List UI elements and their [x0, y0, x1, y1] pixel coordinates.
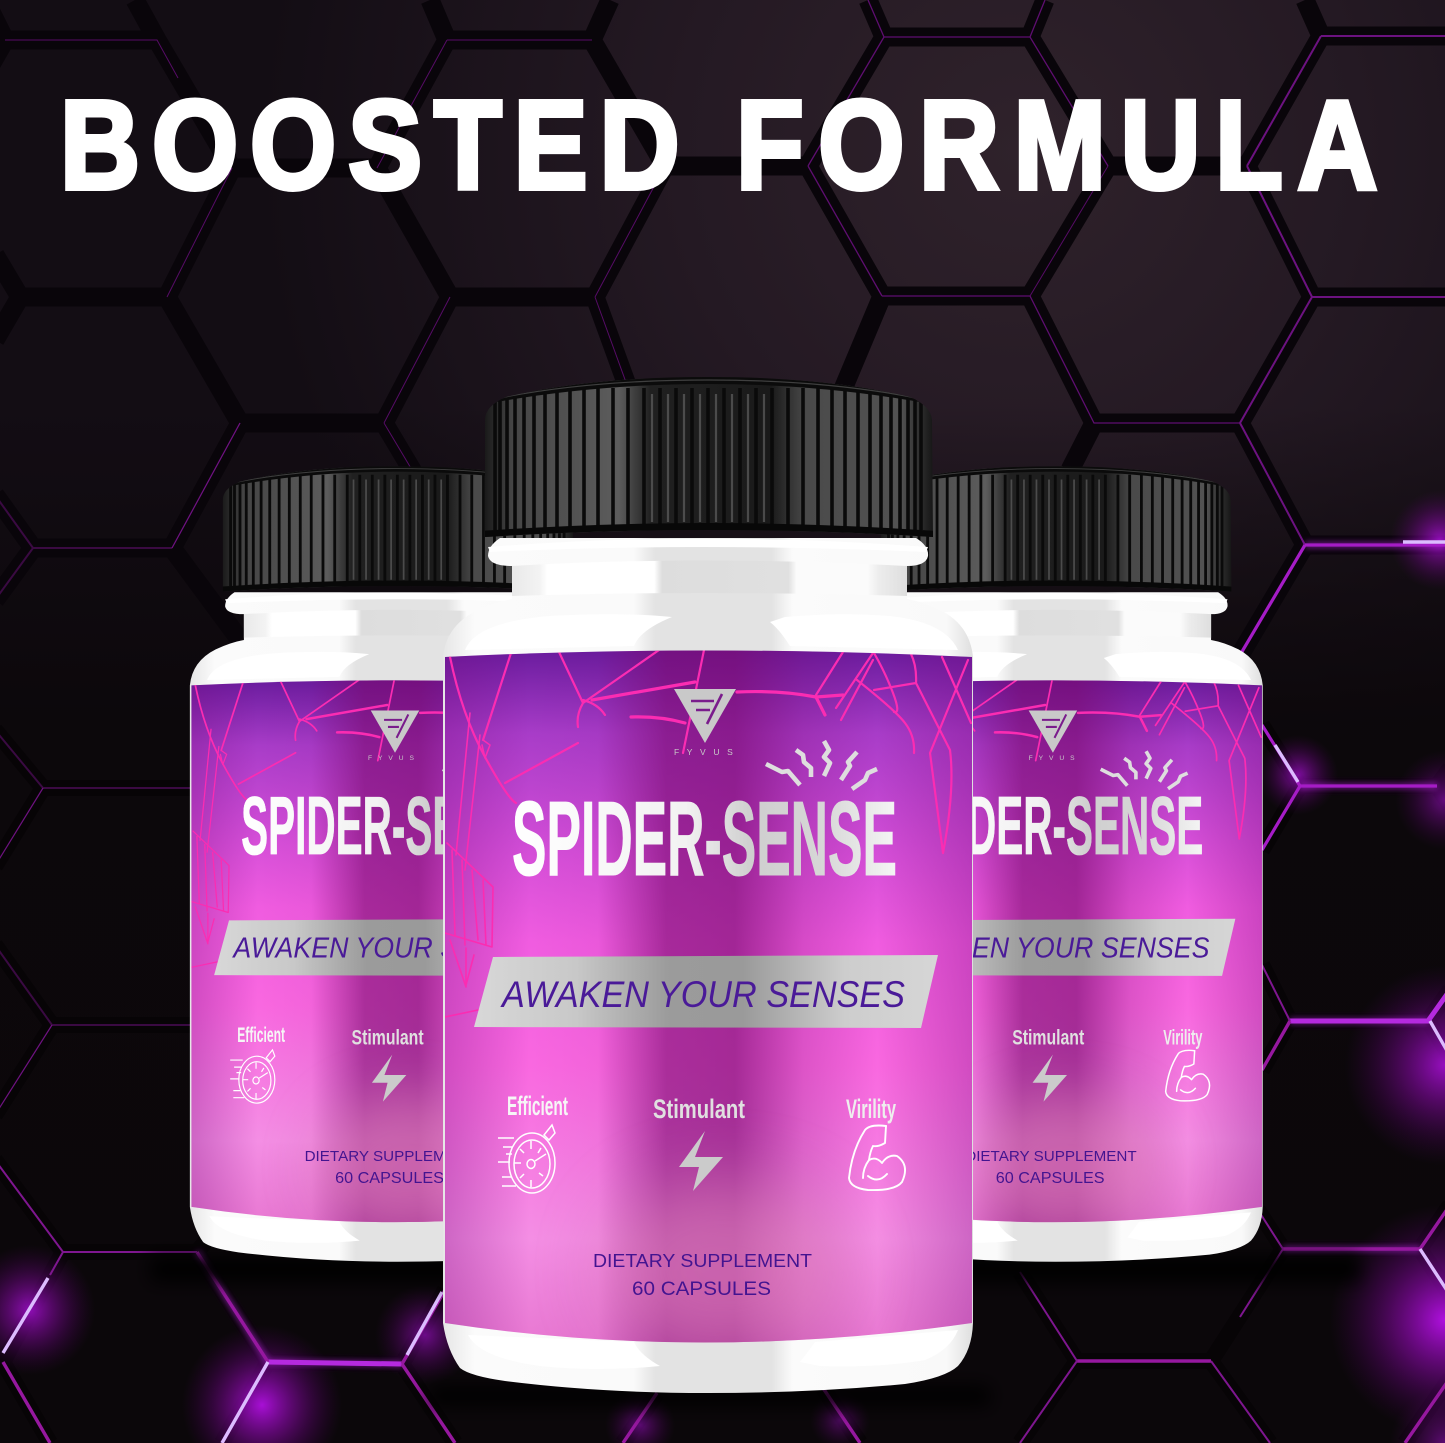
benefit: stimulant	[1012, 1026, 1084, 1102]
product details: 60 CAPSULES	[632, 1278, 771, 1300]
brand mark text: FYVUS	[368, 755, 420, 762]
benefit: stimulant	[352, 1026, 424, 1102]
bottle: left	[190, 461, 605, 1262]
product details: 60 CAPSULES	[335, 1170, 444, 1187]
benefit: virility	[1163, 1026, 1210, 1101]
benefit: efficient	[230, 1024, 285, 1103]
product details	[305, 1149, 476, 1187]
bottle: right	[848, 461, 1263, 1262]
tagline: AWAKEN YOUR SENSES	[500, 974, 905, 1015]
benefit: stimulant	[653, 1094, 745, 1191]
bottle: centre: SPIDER-SENSE	[512, 780, 897, 898]
brand mark text: FYVUS	[1029, 755, 1081, 762]
thin purple lines, upper wall	[5, 40, 1108, 548]
product details: DIETARY SUPPLEMENT	[305, 1149, 476, 1165]
benefit: efficient	[891, 1024, 946, 1103]
product details: DIETARY SUPPLEMENT	[593, 1250, 812, 1271]
benefit: stimulant: Stimulant	[352, 1026, 424, 1049]
dim lines, left wall	[0, 495, 190, 1025]
title: BOOSTED	[60, 76, 680, 216]
benefit: virility: Virility	[846, 1094, 896, 1124]
product details: 60 CAPSULES	[996, 1170, 1105, 1187]
label text: left bottle	[230, 755, 549, 1187]
benefit: efficient: Efficient	[507, 1091, 568, 1121]
benefit: stimulant: Stimulant	[653, 1094, 745, 1124]
benefit: virility: Virility	[503, 1026, 542, 1049]
benefit: virility	[503, 1026, 549, 1101]
purple glow spots	[0, 490, 1445, 1443]
benefit: efficient	[498, 1091, 568, 1193]
title: FORMULA	[736, 76, 1378, 216]
benefit: efficient: Efficient	[237, 1024, 285, 1047]
product details: DIETARY SUPPLEMENT	[965, 1149, 1137, 1165]
tagline: AWAKEN YOUR SENSES	[892, 933, 1210, 965]
title	[60, 76, 1378, 216]
light lilac highlight segments	[3, 542, 1445, 1443]
bright purple lines, lower wall	[197, 545, 1445, 1364]
bottle: left: SPIDER-SENSE	[241, 779, 543, 872]
tagline: AWAKEN YOUR SENSES	[231, 933, 549, 965]
benefit: virility	[846, 1094, 905, 1190]
product details	[593, 1250, 812, 1300]
bottle: centre	[443, 370, 973, 1393]
benefit: efficient: Efficient	[898, 1024, 946, 1047]
floor shadow band	[150, 1256, 1360, 1406]
benefit: virility: Virility	[1163, 1026, 1203, 1049]
brand mark text: FYVUS	[674, 747, 740, 757]
benefit: stimulant: Stimulant	[1012, 1026, 1084, 1049]
label text: right bottle	[891, 755, 1210, 1187]
product details	[965, 1149, 1137, 1187]
